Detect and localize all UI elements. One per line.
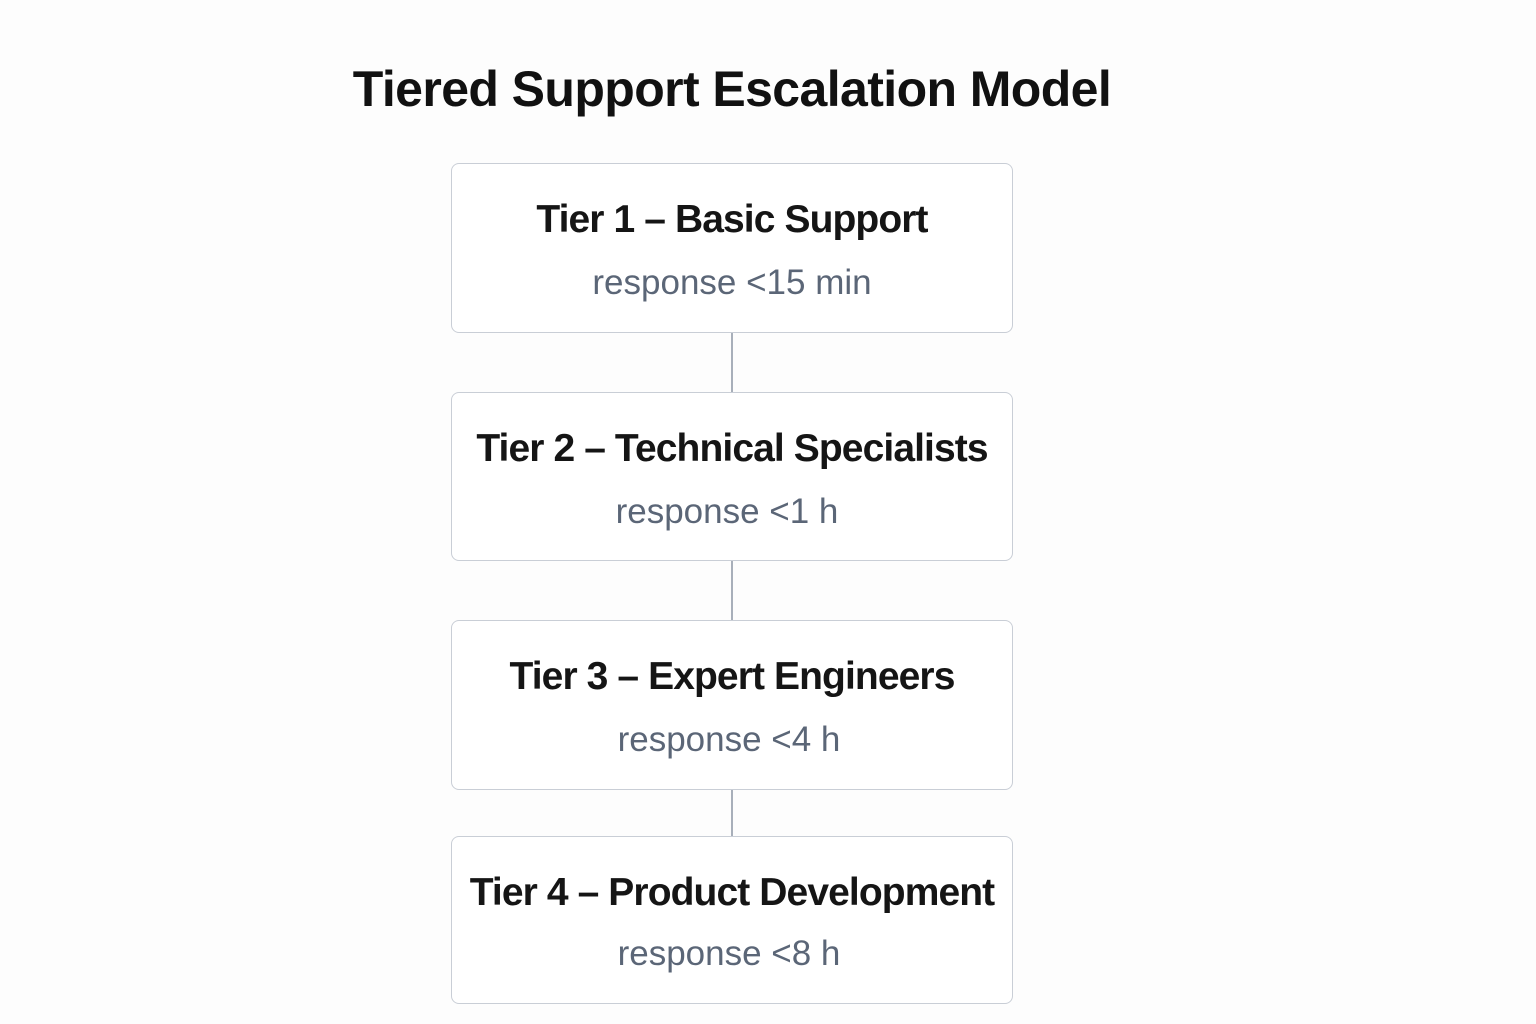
heading: tier 3: Tier 3 – Expert Engineers: [510, 655, 954, 698]
heading: tier 4: Tier 4 – Product Development: [470, 871, 994, 914]
connector 2-3: [731, 561, 732, 620]
panel: tier 4: [451, 836, 1013, 1004]
connector 3-4: [731, 790, 732, 836]
text: tier 4 response: response <8 h: [618, 934, 840, 973]
heading: tier 2: Tier 2 – Technical Specialists: [476, 427, 988, 470]
heading: tier 1: Tier 1 – Basic Support: [536, 198, 928, 241]
panel: tier 2: [451, 392, 1013, 561]
title: Tiered Support Escalation Model: [353, 61, 1111, 117]
text: tier 2 response: response <1 h: [616, 492, 838, 531]
text: tier 1 response: response <15 min: [592, 263, 872, 302]
panel: tier 1: [451, 163, 1013, 333]
panel: tier 3: [451, 620, 1013, 790]
text: tier 3 response: response <4 h: [618, 720, 840, 759]
connector 1-2: [731, 333, 732, 392]
